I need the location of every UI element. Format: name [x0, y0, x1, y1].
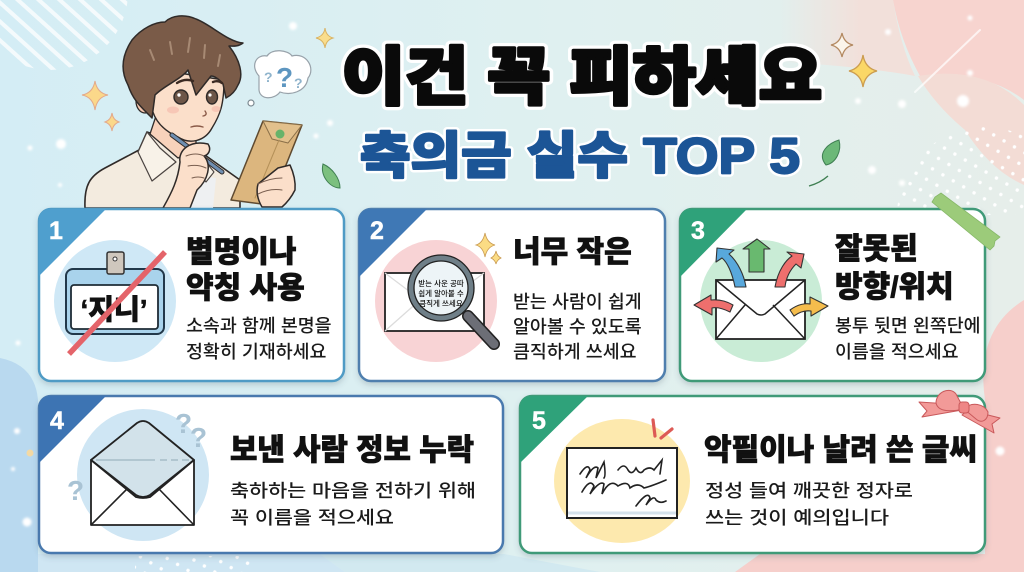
eyes [174, 90, 188, 104]
card 4 body [230, 480, 476, 528]
eyebrows [177, 80, 222, 83]
number badge 1: 1 [49, 217, 63, 245]
card 3 heading: 잘못된 [835, 233, 918, 266]
number badge 5: 5 [532, 407, 546, 435]
card 3 heading [835, 233, 954, 304]
card 3 body [835, 315, 981, 362]
number badge 4 [39, 396, 106, 463]
icon: name badge crossed out: ‘지니’ [80, 294, 148, 325]
card 4 [39, 396, 503, 553]
sparkles [82, 28, 877, 131]
number badge 2: 2 [370, 217, 384, 245]
card 5 heading: 악필이나 날려 쓴 글씨 [704, 434, 977, 467]
card 3 [680, 193, 1000, 381]
leaves [322, 140, 840, 188]
card 2 heading: 너무 작은 [513, 236, 632, 269]
thought bubble with question marks: ? [276, 62, 293, 93]
icon: envelope with magnifier: 큼직게 쓰세요 [419, 298, 463, 308]
ear [136, 89, 154, 113]
thought bubble with question marks: ? [264, 69, 273, 85]
number badge 3 [680, 209, 747, 277]
icon: envelope with magnifier [375, 240, 497, 362]
number badge 2 [359, 209, 427, 277]
icon: open envelope with question marks: ? [67, 475, 84, 506]
right hand [257, 165, 295, 207]
writing hand [163, 143, 210, 208]
icon: envelope with magnifier: 쉽게 알아볼 수 [418, 288, 464, 298]
shirt [85, 132, 240, 208]
card 2 body: 큼직하게 쓰세요 [513, 341, 637, 362]
icon: card with messy handwriting [554, 419, 690, 543]
number badge 5 [520, 396, 588, 463]
thought bubble with question marks [248, 51, 311, 106]
card 5 [520, 390, 1000, 553]
mouth and nose [191, 111, 206, 127]
card 1 heading [186, 236, 305, 305]
thought bubble with question marks: ? [294, 75, 303, 91]
card 1 heading: 약칭 사용 [186, 272, 305, 305]
character: man holding envelope [85, 16, 302, 208]
icon: name badge crossed out [54, 240, 176, 362]
card 1 body: 정확히 기재하세요 [186, 341, 327, 362]
card 1 body [186, 315, 332, 362]
card 1 [39, 209, 344, 381]
ribbon bow [919, 390, 1000, 433]
icon: open envelope with question marks [67, 408, 209, 541]
number badge 3: 3 [691, 217, 705, 245]
card 4 body: 꼭 이름을 적으세요 [230, 507, 394, 528]
kraft envelope [231, 121, 302, 205]
neck and face [150, 116, 196, 158]
title: 이건 꼭 피하세요 [342, 43, 822, 113]
card 3 body: 봉투 뒷면 왼쪽단에 [835, 315, 981, 336]
subtitle: 축의금 실수 TOP 5 [360, 128, 800, 184]
subtitle: 축의금 실수 TOP 5 [360, 128, 800, 184]
card 1 heading: 별명이나 [186, 236, 296, 269]
card 4 heading: 보낸 사람 정보 누락 [230, 434, 474, 467]
card 3 body: 이름을 적으세요 [835, 341, 959, 362]
number badge 4: 4 [50, 407, 64, 435]
sparkles [476, 233, 501, 264]
card 4 body: 축하하는 마음을 전하기 위해 [230, 480, 476, 501]
tape [932, 193, 1000, 250]
card 3 heading: 방향/위치 [835, 271, 954, 304]
card 5 body: 쓰는 것이 예의입니다 [705, 507, 889, 528]
icon: envelope with arrows [694, 239, 828, 362]
pen [172, 135, 222, 172]
title: 이건 꼭 피하세요 [342, 43, 822, 113]
card 1 body: 소속과 함께 본명을 [186, 315, 332, 336]
icon: open envelope with question marks: ? [190, 422, 207, 453]
card 2 [359, 209, 665, 381]
number badge 1 [39, 209, 106, 276]
card 2 body: 받는 사람이 쉽게 [513, 291, 642, 312]
card 2 body [513, 291, 642, 362]
hair [123, 16, 243, 118]
card 2 body: 알아볼 수 있도록 [513, 316, 642, 337]
card 5 body: 정성 들여 깨끗한 정자로 [705, 480, 913, 501]
icon: open envelope with question marks: ? [175, 408, 192, 439]
card 5 body [705, 480, 913, 528]
icon: envelope with magnifier: 받는 사운 공따 [418, 278, 464, 288]
